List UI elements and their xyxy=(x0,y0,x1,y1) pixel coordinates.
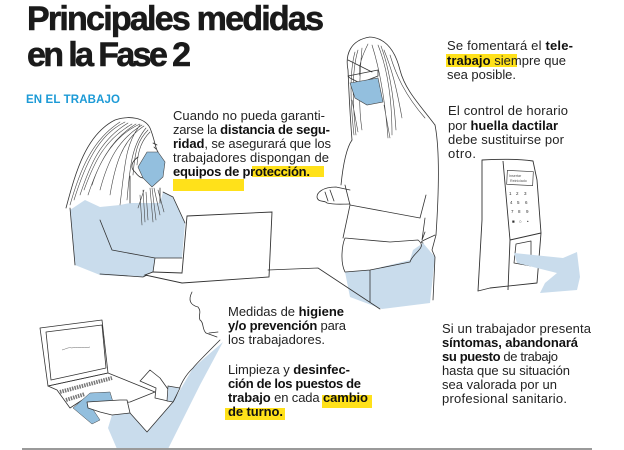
title: Principales medidas xyxy=(27,0,324,38)
keypad: 9 xyxy=(526,209,529,214)
text block: telework: Se fomentará el tele- xyxy=(447,38,573,53)
text block: cleaning xyxy=(228,362,368,419)
text block: telework: trabajo siempre que xyxy=(447,53,566,68)
keypad: ■ xyxy=(512,219,515,224)
text block: protection: Cuando no pueda garanti- xyxy=(173,108,325,123)
icon: glasses xyxy=(348,60,378,83)
icon: hand on reader xyxy=(514,252,580,293)
text block: fingerprint: El control de horario xyxy=(448,103,568,118)
keypad: 2 xyxy=(516,191,519,196)
hands xyxy=(87,400,130,415)
illustration: fingerprint time clock xyxy=(478,159,580,293)
text block: symptoms: profesional sanitario. xyxy=(442,391,567,406)
text block: telework: sea posible. xyxy=(447,67,516,82)
desk line xyxy=(268,268,380,309)
text block: cleaning: ción de los puestos de xyxy=(228,376,361,391)
keypad: 8 xyxy=(518,209,521,214)
text block: protection: equipos de protección. xyxy=(173,164,310,179)
title: en la Fase 2 xyxy=(27,36,191,74)
display: Reiniciado xyxy=(510,179,527,183)
laptop xyxy=(145,212,272,283)
title xyxy=(27,0,324,74)
illustration: seated woman with laptop xyxy=(66,118,272,283)
text block: hygiene xyxy=(228,304,347,347)
keypad xyxy=(509,191,529,224)
display: Insertar xyxy=(509,174,522,178)
text block: cleaning: Limpieza y desinfec- xyxy=(228,362,350,377)
icon: cleaning cloth xyxy=(73,392,113,424)
keypad: • xyxy=(527,219,529,224)
keypad: ○ xyxy=(519,219,522,224)
keypad: 6 xyxy=(525,200,528,205)
keypad: 5 xyxy=(517,200,520,205)
text block: symptoms xyxy=(442,321,592,406)
section heading: EN EL TRABAJO xyxy=(26,94,120,106)
text block: fingerprint: debe sustituirse por xyxy=(448,132,565,147)
laptop keyboard and screen xyxy=(40,320,108,386)
illustration: cleaning a laptop xyxy=(40,292,223,449)
text block: symptoms: sea valorada por un xyxy=(442,377,557,392)
icon: face mask xyxy=(138,152,165,187)
text block: cleaning: trabajo en cada cambio xyxy=(228,390,368,405)
text block: protection: ridad, se asegurará que los xyxy=(173,136,332,151)
keypad: 3 xyxy=(524,191,527,196)
bottom rule xyxy=(22,448,592,450)
text block: symptoms: síntomas, abandonará xyxy=(442,335,579,350)
keypad: 4 xyxy=(510,200,513,205)
text block: symptoms: su puesto de trabajo xyxy=(442,349,558,364)
text block: protection xyxy=(173,108,332,179)
text block: telework xyxy=(447,38,573,82)
highlight marks xyxy=(173,54,517,420)
keypad: 7 xyxy=(511,209,514,214)
text block: fingerprint: otro. xyxy=(448,146,476,161)
text block: hygiene: Medidas de higiene xyxy=(228,304,344,319)
text block: hygiene: y/o prevención para xyxy=(228,318,347,333)
text block: protection: trabajadores dispongan de xyxy=(173,150,329,165)
text block: cleaning: de turno. xyxy=(228,404,283,419)
text block: fingerprint: por huella dactilar xyxy=(448,118,558,133)
illustration: standing woman with mask xyxy=(317,37,438,309)
display xyxy=(507,170,533,186)
text block: protection: zarse la distancia de segu- xyxy=(173,122,330,137)
icon: face mask xyxy=(350,78,383,105)
keypad: 1 xyxy=(509,191,512,196)
text block: symptoms: hasta que su situación xyxy=(442,363,570,378)
text block: hygiene: los trabajadores. xyxy=(228,332,325,347)
text block: fingerprint xyxy=(448,103,568,161)
text block: symptoms: Si un trabajador presenta xyxy=(442,321,592,336)
